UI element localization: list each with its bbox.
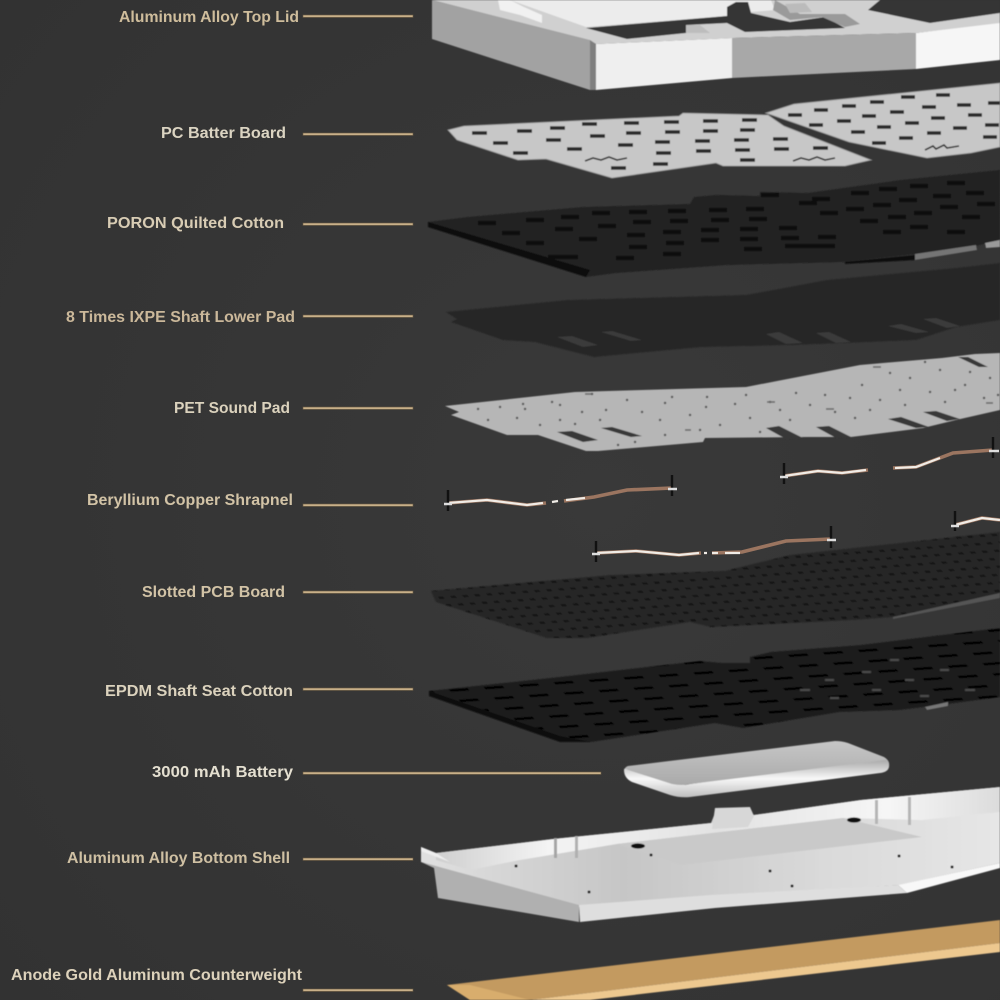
label: 8 times IXPE shaft lower pad: 8 Times IXPE Shaft Lower Pad [66, 309, 295, 326]
layer: IXPE shaft lower pad [446, 263, 1000, 357]
layer: PORON quilted cotton [428, 170, 1000, 277]
layer: PET sound pad [445, 353, 1000, 451]
layer: anode gold aluminum counterweight [447, 920, 1000, 1000]
label: aluminum alloy bottom shell: Aluminum Alloy Bottom Shell [67, 850, 290, 867]
label: 3000 mAh battery: 3000 mAh Battery [152, 764, 293, 781]
layer: aluminum alloy top lid [432, 0, 1000, 90]
label: aluminum alloy top lid: Aluminum Alloy Top Lid [119, 9, 299, 26]
label: PORON quilted cotton: PORON Quilted Cotton [107, 215, 284, 232]
label: anode gold aluminum counterweight: Anode Gold Aluminum Counterweight [11, 967, 302, 984]
label: beryllium copper shrapnel: Beryllium Copper Shrapnel [87, 492, 293, 509]
label: PC batter board: PC Batter Board [161, 125, 286, 142]
layer: aluminum alloy bottom shell [421, 787, 1000, 922]
label: slotted PCB board: Slotted PCB Board [142, 584, 285, 601]
layer: 3000 mAh battery [624, 741, 889, 797]
layer: slotted PCB board [431, 532, 1000, 638]
label: EPDM shaft seat cotton: EPDM Shaft Seat Cotton [105, 683, 293, 700]
layer: PC batter board [448, 83, 1000, 178]
layer: EPDM shaft seat cotton [429, 628, 1000, 742]
layer: beryllium copper shrapnel [444, 437, 1000, 562]
label: PET sound pad: PET Sound Pad [174, 400, 290, 417]
